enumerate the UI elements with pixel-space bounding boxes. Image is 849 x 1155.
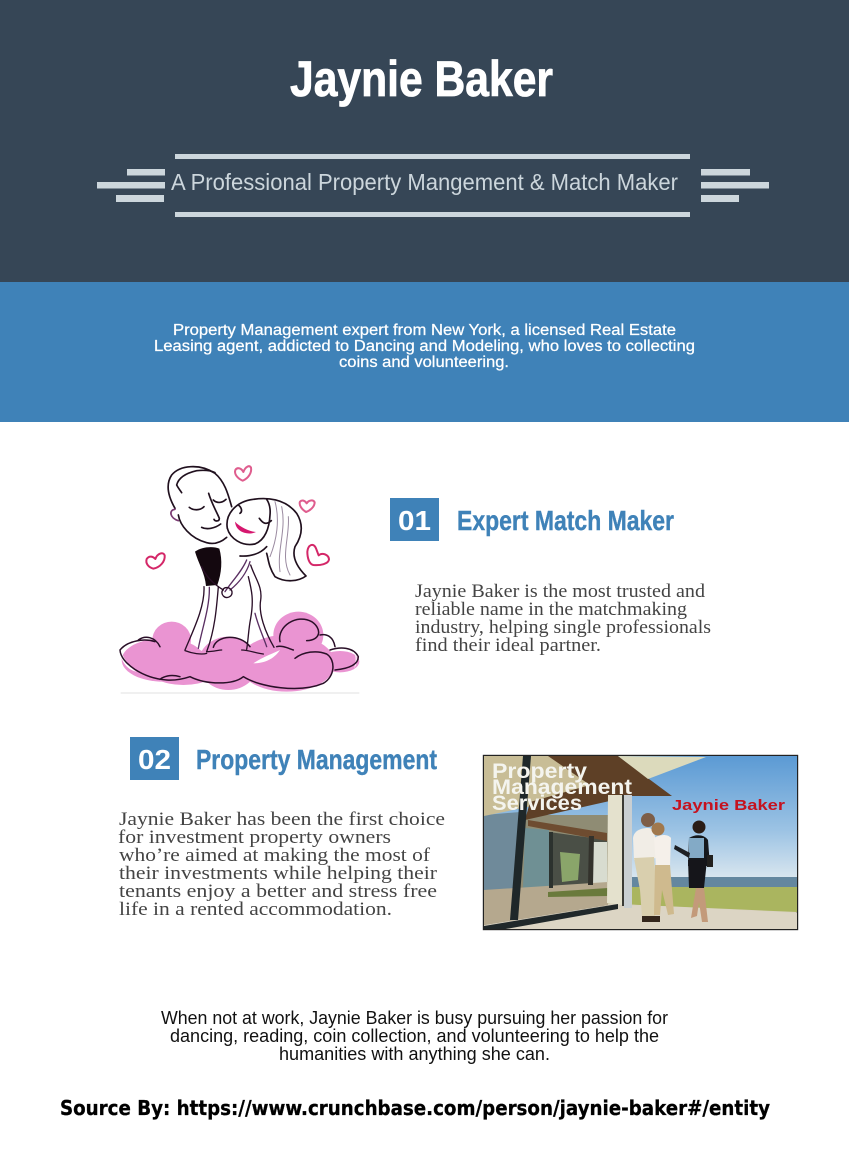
man — [633, 828, 657, 860]
closing statement: humanities with anything she can. — [279, 1044, 550, 1064]
columns — [607, 795, 622, 905]
closing statement: When not at work, Jaynie Baker is busy pursuing her passion for — [161, 1008, 668, 1028]
left interior — [484, 815, 608, 925]
photo: property management services — [484, 756, 798, 930]
woman's head and hair — [227, 499, 306, 581]
introduction text: Leasing agent, addicted to Dancing and Modeling, who loves to collecting — [154, 338, 695, 355]
hair strands — [270, 502, 290, 575]
photo caption: property management services: Management — [492, 776, 632, 799]
section 02 text: tenants enjoy a better and stress free — [119, 881, 437, 902]
section 01 text: find their ideal partner. — [415, 635, 601, 656]
roof underside — [525, 756, 672, 820]
three people — [633, 813, 713, 922]
section 02 text — [118, 809, 445, 920]
illustration: couple on a pink cloud — [120, 466, 359, 693]
man's black shirt — [195, 547, 221, 586]
photo caption: name: Jaynie Baker — [672, 797, 785, 814]
cloud highlights — [121, 650, 357, 672]
sea — [632, 877, 797, 887]
section 01 text: industry, helping single professionals — [415, 617, 711, 638]
panel: introduction — [0, 282, 849, 422]
photo caption: property management services — [492, 760, 632, 815]
cream roof top — [618, 756, 706, 779]
woman's legs and arms — [202, 560, 274, 654]
window posts — [510, 756, 531, 920]
pink cloud fill — [122, 612, 359, 692]
photo caption: property management services: Property — [492, 760, 587, 783]
man's legs — [185, 587, 222, 654]
closing statement — [161, 1008, 668, 1064]
photo caption: property management services: Services — [492, 792, 582, 815]
section 02 heading: 02 — [138, 744, 171, 775]
section 01 heading: Expert Match Maker — [457, 505, 674, 536]
section 02 heading: Property Management — [196, 744, 437, 775]
section 02 text: for investment property owners — [118, 827, 391, 848]
source line: Source By: https://www.crunchbase.com/person/jaynie-baker#/entity — [60, 1096, 770, 1120]
woman's lips — [235, 522, 256, 533]
panel: header — [0, 0, 849, 282]
sky — [484, 756, 797, 880]
introduction text: coins and volunteering. — [339, 354, 509, 371]
section 02 text: Jaynie Baker has been the first choice — [119, 809, 445, 830]
mid beam — [528, 820, 607, 841]
subtitle banner: A Professional Property Mangement & Match Maker — [171, 169, 678, 195]
section 02 text: life in a rented accommodation. — [119, 899, 392, 920]
section 02 text: who’re aimed at making the most of — [119, 845, 431, 866]
section 02 heading — [130, 737, 437, 780]
agent — [688, 835, 710, 866]
section 01 heading — [390, 498, 674, 541]
closing statement: dancing, reading, coin collection, and volunteering to help the — [170, 1026, 659, 1046]
cloud outlines — [120, 619, 358, 688]
section 02 text: their investments while helping their — [119, 863, 438, 884]
section 01 text — [415, 581, 711, 656]
hands — [222, 588, 232, 597]
ceiling — [484, 756, 590, 816]
introduction text — [154, 322, 695, 371]
section 01 text: reliable name in the matchmaking — [415, 599, 688, 620]
section 01 text: Jaynie Baker is the most trusted and — [415, 581, 706, 602]
subtitle banner — [97, 154, 769, 217]
section 01 heading: 01 — [398, 505, 431, 536]
hearts — [146, 466, 329, 569]
woman in white — [654, 835, 671, 866]
terrace floor — [484, 905, 797, 929]
introduction text: Property Management expert from New York, a licensed Real Estate — [173, 322, 676, 339]
title: Jaynie Baker — [290, 51, 553, 107]
lawn — [600, 887, 797, 912]
man's head — [168, 467, 232, 543]
